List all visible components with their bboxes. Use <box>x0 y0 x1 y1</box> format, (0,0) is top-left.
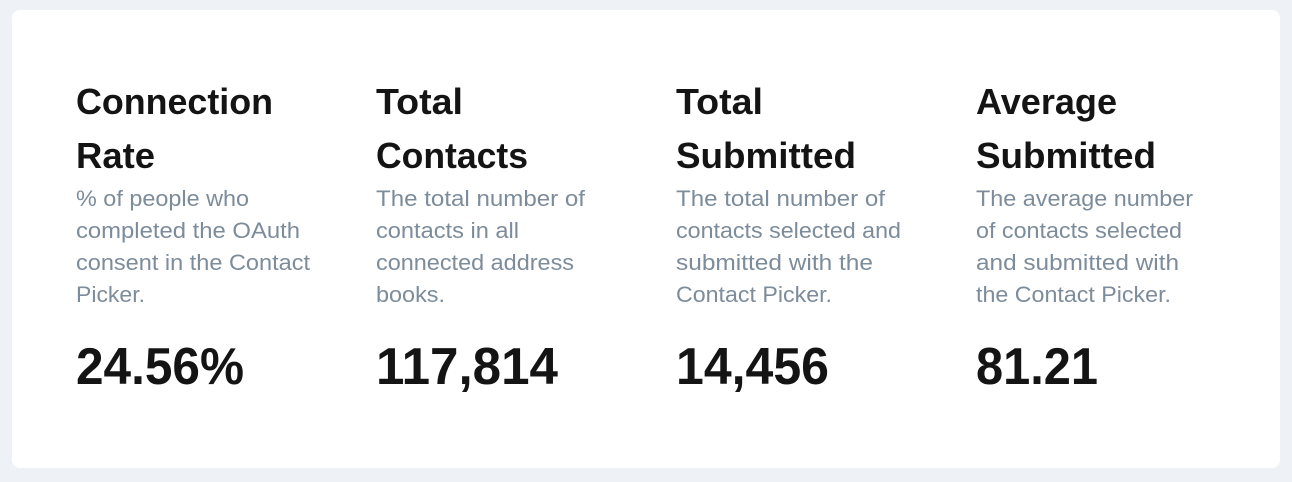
description: total submitted: submitted with the <box>676 250 873 275</box>
description: connection rate: consent in the Contact <box>76 250 310 275</box>
description: average submitted: the Contact Picker. <box>976 282 1171 307</box>
value: average submitted: 81.21 <box>976 338 1098 396</box>
description: average submitted: and submitted with <box>976 250 1179 275</box>
description: total submitted: contacts selected and <box>676 218 901 243</box>
heading: average submitted <box>976 81 1156 176</box>
description: average submitted <box>976 186 1193 307</box>
description: connection rate: completed the OAuth <box>76 218 300 243</box>
description: total submitted: Contact Picker. <box>676 282 832 307</box>
description: total contacts: connected address <box>376 250 574 275</box>
heading: total submitted: Submitted <box>676 135 856 176</box>
heading: total submitted: Total <box>676 81 763 122</box>
heading: total submitted <box>676 81 856 176</box>
heading: average submitted: Submitted <box>976 135 1156 176</box>
description: connection rate: % of people who <box>76 186 249 211</box>
value: total submitted: 14,456 <box>676 338 829 396</box>
description: total contacts: contacts in all <box>376 218 519 243</box>
heading: connection rate: Connection <box>76 81 273 122</box>
description: total contacts <box>376 186 586 307</box>
heading: total contacts: Total <box>376 81 463 122</box>
metric column: average submitted <box>976 81 1193 396</box>
description: connection rate <box>76 186 310 307</box>
description: total contacts: books. <box>376 282 445 307</box>
description: total submitted <box>676 186 901 307</box>
value: total contacts: 117,814 <box>376 338 558 396</box>
description: average submitted: of contacts selected <box>976 218 1182 243</box>
value: connection rate: 24.56% <box>76 338 244 396</box>
metric column: total submitted <box>676 81 901 396</box>
metric column: total contacts <box>376 81 586 396</box>
heading: average submitted: Average <box>976 81 1117 122</box>
heading: connection rate <box>76 81 273 176</box>
metric column: connection rate <box>76 81 310 396</box>
description: average submitted: The average number <box>976 186 1193 211</box>
heading: total contacts: Contacts <box>376 135 528 176</box>
description: total contacts: The total number of <box>376 186 586 211</box>
heading: total contacts <box>376 81 528 176</box>
heading: connection rate: Rate <box>76 135 155 176</box>
description: connection rate: Picker. <box>76 282 145 307</box>
description: total submitted: The total number of <box>676 186 886 211</box>
